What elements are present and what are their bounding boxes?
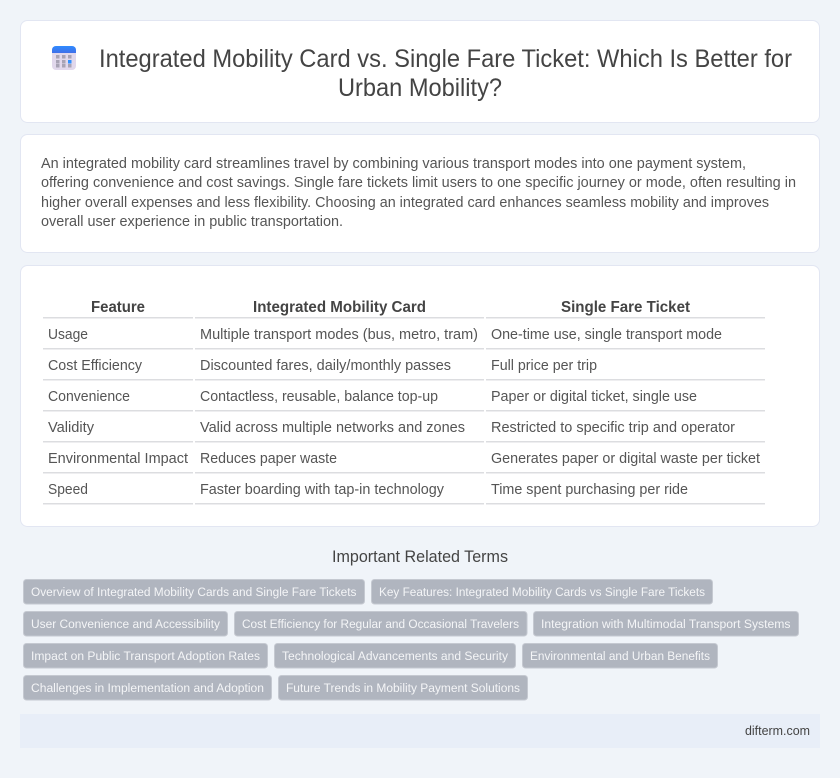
table row: usage: One-time use, single transport mode	[491, 327, 722, 343]
text block: introduction paragraph: An integrated mobility card streamlines travel by combining various transport modes into one payment system,	[41, 156, 746, 172]
table row: environmental impact	[43, 451, 765, 474]
tag: technological advancements: Technological Advancements and Security	[282, 649, 509, 663]
tag: environmental benefits	[522, 644, 718, 668]
tag: integration	[534, 612, 798, 636]
table row: environmental impact: Environmental Impact	[48, 451, 188, 467]
table row: validity	[43, 420, 765, 442]
title: Urban Mobility?	[338, 74, 502, 102]
table row: cost efficiency: Discounted fares, daily/monthly passes	[200, 358, 451, 374]
table row: usage	[43, 327, 765, 350]
table row: cost efficiency: Cost Efficiency	[48, 358, 143, 374]
table row: speed	[43, 482, 765, 504]
related term tags	[24, 580, 798, 700]
table row: convenience: Paper or digital ticket, single use	[491, 389, 697, 405]
table header row: Integrated Mobility Card	[253, 299, 426, 316]
table row: validity: Valid across multiple networks and zones	[200, 420, 465, 436]
table row: cost efficiency: Full price per trip	[491, 358, 597, 374]
title	[99, 45, 792, 102]
tag: future trends: Future Trends in Mobility Payment Solutions	[286, 681, 520, 695]
tag: cost efficiency: Cost Efficiency for Regular and Occasional Travelers	[242, 617, 519, 631]
table header row: Single Fare Ticket	[561, 299, 691, 316]
panel: header	[20, 20, 820, 122]
table row: speed: Time spent purchasing per ride	[491, 482, 688, 498]
table row: cost efficiency	[43, 358, 765, 380]
title: Integrated Mobility Card vs. Single Fare Ticket: Which Is Better for	[99, 45, 792, 73]
table header row	[43, 299, 765, 318]
table row: usage: Usage	[48, 327, 88, 343]
table row: usage: Multiple transport modes (bus, metro, tram)	[200, 327, 478, 343]
text block: introduction paragraph: higher overall expenses and less flexibility. Choosing an integrated card enhances seamless mobility and improves	[41, 195, 769, 211]
table row: convenience	[43, 389, 765, 412]
tag: key features: Key Features: Integrated Mobility Cards vs Single Fare Tickets	[379, 585, 705, 599]
table row: speed: Speed	[48, 482, 88, 498]
tag: integration: Integration with Multimodal Transport Systems	[541, 617, 790, 631]
tag: impact on adoption	[24, 644, 268, 668]
table row: environmental impact: Generates paper or digital waste per ticket	[491, 451, 760, 467]
icon: calendar	[52, 46, 76, 70]
panel: introduction	[20, 134, 820, 252]
footer	[20, 714, 820, 748]
tag: cost efficiency	[234, 612, 527, 636]
text block: introduction paragraph: offering convenience and cost savings. Single fare tickets limit users to one specific journey or mode, often resulting in	[41, 175, 796, 191]
tag: overview	[24, 580, 364, 604]
heading: important related terms: Important Related Terms	[332, 548, 508, 566]
table row: convenience: Contactless, reusable, balance top-up	[200, 389, 438, 405]
tag: technological advancements	[274, 644, 516, 668]
footer: difterm.com	[745, 724, 810, 738]
panel: comparison table	[20, 266, 820, 526]
tag: key features	[372, 580, 712, 604]
tag: challenges: Challenges in Implementation and Adoption	[31, 681, 264, 695]
tag: challenges	[24, 676, 272, 700]
table row: validity: Restricted to specific trip and operator	[491, 420, 735, 436]
table row: validity: Validity	[48, 420, 95, 436]
table row: environmental impact: Reduces paper waste	[200, 451, 337, 467]
tag: user convenience	[24, 612, 228, 636]
tag: environmental benefits: Environmental and Urban Benefits	[530, 649, 710, 663]
text block: introduction paragraph	[41, 156, 796, 230]
tag: impact on adoption: Impact on Public Transport Adoption Rates	[31, 649, 260, 663]
table row: convenience: Convenience	[48, 389, 130, 405]
tag: future trends	[278, 676, 528, 700]
tag: overview: Overview of Integrated Mobility Cards and Single Fare Tickets	[31, 585, 356, 599]
table header row: Feature	[91, 299, 145, 316]
text block: introduction paragraph: overall user experience in public transportation.	[41, 214, 343, 230]
table row: speed: Faster boarding with tap-in technology	[200, 482, 445, 498]
tag: user convenience: User Convenience and Accessibility	[31, 617, 221, 631]
